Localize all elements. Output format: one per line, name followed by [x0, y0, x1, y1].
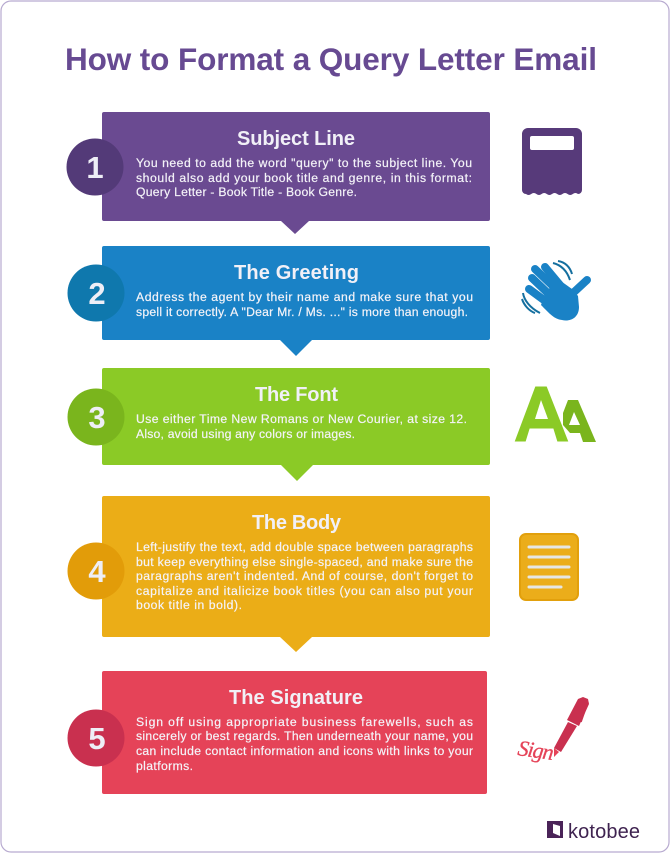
panel: the body: but keep everything else single-spaced, and make sure the	[136, 555, 473, 569]
logo: kotobee: kotobee	[568, 821, 640, 843]
panel: subject line: You need to add the word "query" to the subject line. You	[136, 156, 472, 170]
icon: receipt	[522, 128, 582, 195]
panel: the font: Also, avoid using any colors or images.	[136, 427, 355, 441]
panel: subject line: 1	[86, 150, 104, 185]
icon: letters AA	[514, 386, 596, 442]
panel: the signature: platforms.	[136, 759, 193, 773]
panel: the body: capitalize and italicize book titles (you can also put your	[136, 584, 473, 598]
panel: the greeting: 2	[88, 276, 106, 311]
icon: document	[520, 534, 578, 600]
panel: the body: 4	[88, 554, 106, 589]
icon: pen signing: Sign	[516, 735, 555, 765]
icon: pen signing	[516, 697, 589, 765]
panel: the body: Left-justify the text, add double space between paragraphs	[136, 540, 473, 554]
panel: subject line: should also add your book title and genre, in this format:	[136, 171, 472, 185]
panel: the font: Use either Time New Romans or New Courier, at size 12.	[136, 412, 467, 426]
panel: subject line: Query Letter - Book Title - Book Genre.	[136, 185, 357, 199]
panel: the body: book title in bold).	[136, 598, 242, 612]
panel: the signature: sincerely or best regards. Then underneath your name, you	[136, 729, 473, 743]
panel: the greeting	[68, 246, 490, 356]
panel: the signature: can include contact information and icons with links to your	[136, 744, 473, 758]
panel: the font	[68, 368, 490, 481]
icon: waving hand	[522, 261, 587, 320]
title: How to Format a Query Letter Email	[65, 41, 597, 77]
panel: the body	[68, 496, 490, 652]
panel: the signature	[68, 671, 487, 794]
panel: the greeting: spell it correctly. A "Dear Mr. / Ms. ..." is more than enough.	[136, 305, 468, 319]
panel: the body: The Body	[252, 512, 342, 534]
panel: the signature: The Signature	[229, 687, 363, 709]
panel: the signature: 5	[88, 721, 106, 756]
panel: the font: 3	[88, 400, 106, 435]
panel: the greeting: The Greeting	[234, 262, 359, 284]
panel: the greeting: Address the agent by their name and make sure that you	[136, 290, 473, 304]
panel: the body: paragraphs aren't indented. And of course, don't forget to	[136, 569, 473, 583]
panel: subject line: Subject Line	[237, 128, 355, 150]
panel: the signature: Sign off using appropriate business farewells, such as	[136, 715, 473, 729]
panel: the font: The Font	[255, 384, 338, 406]
panel: subject line	[66, 112, 490, 234]
